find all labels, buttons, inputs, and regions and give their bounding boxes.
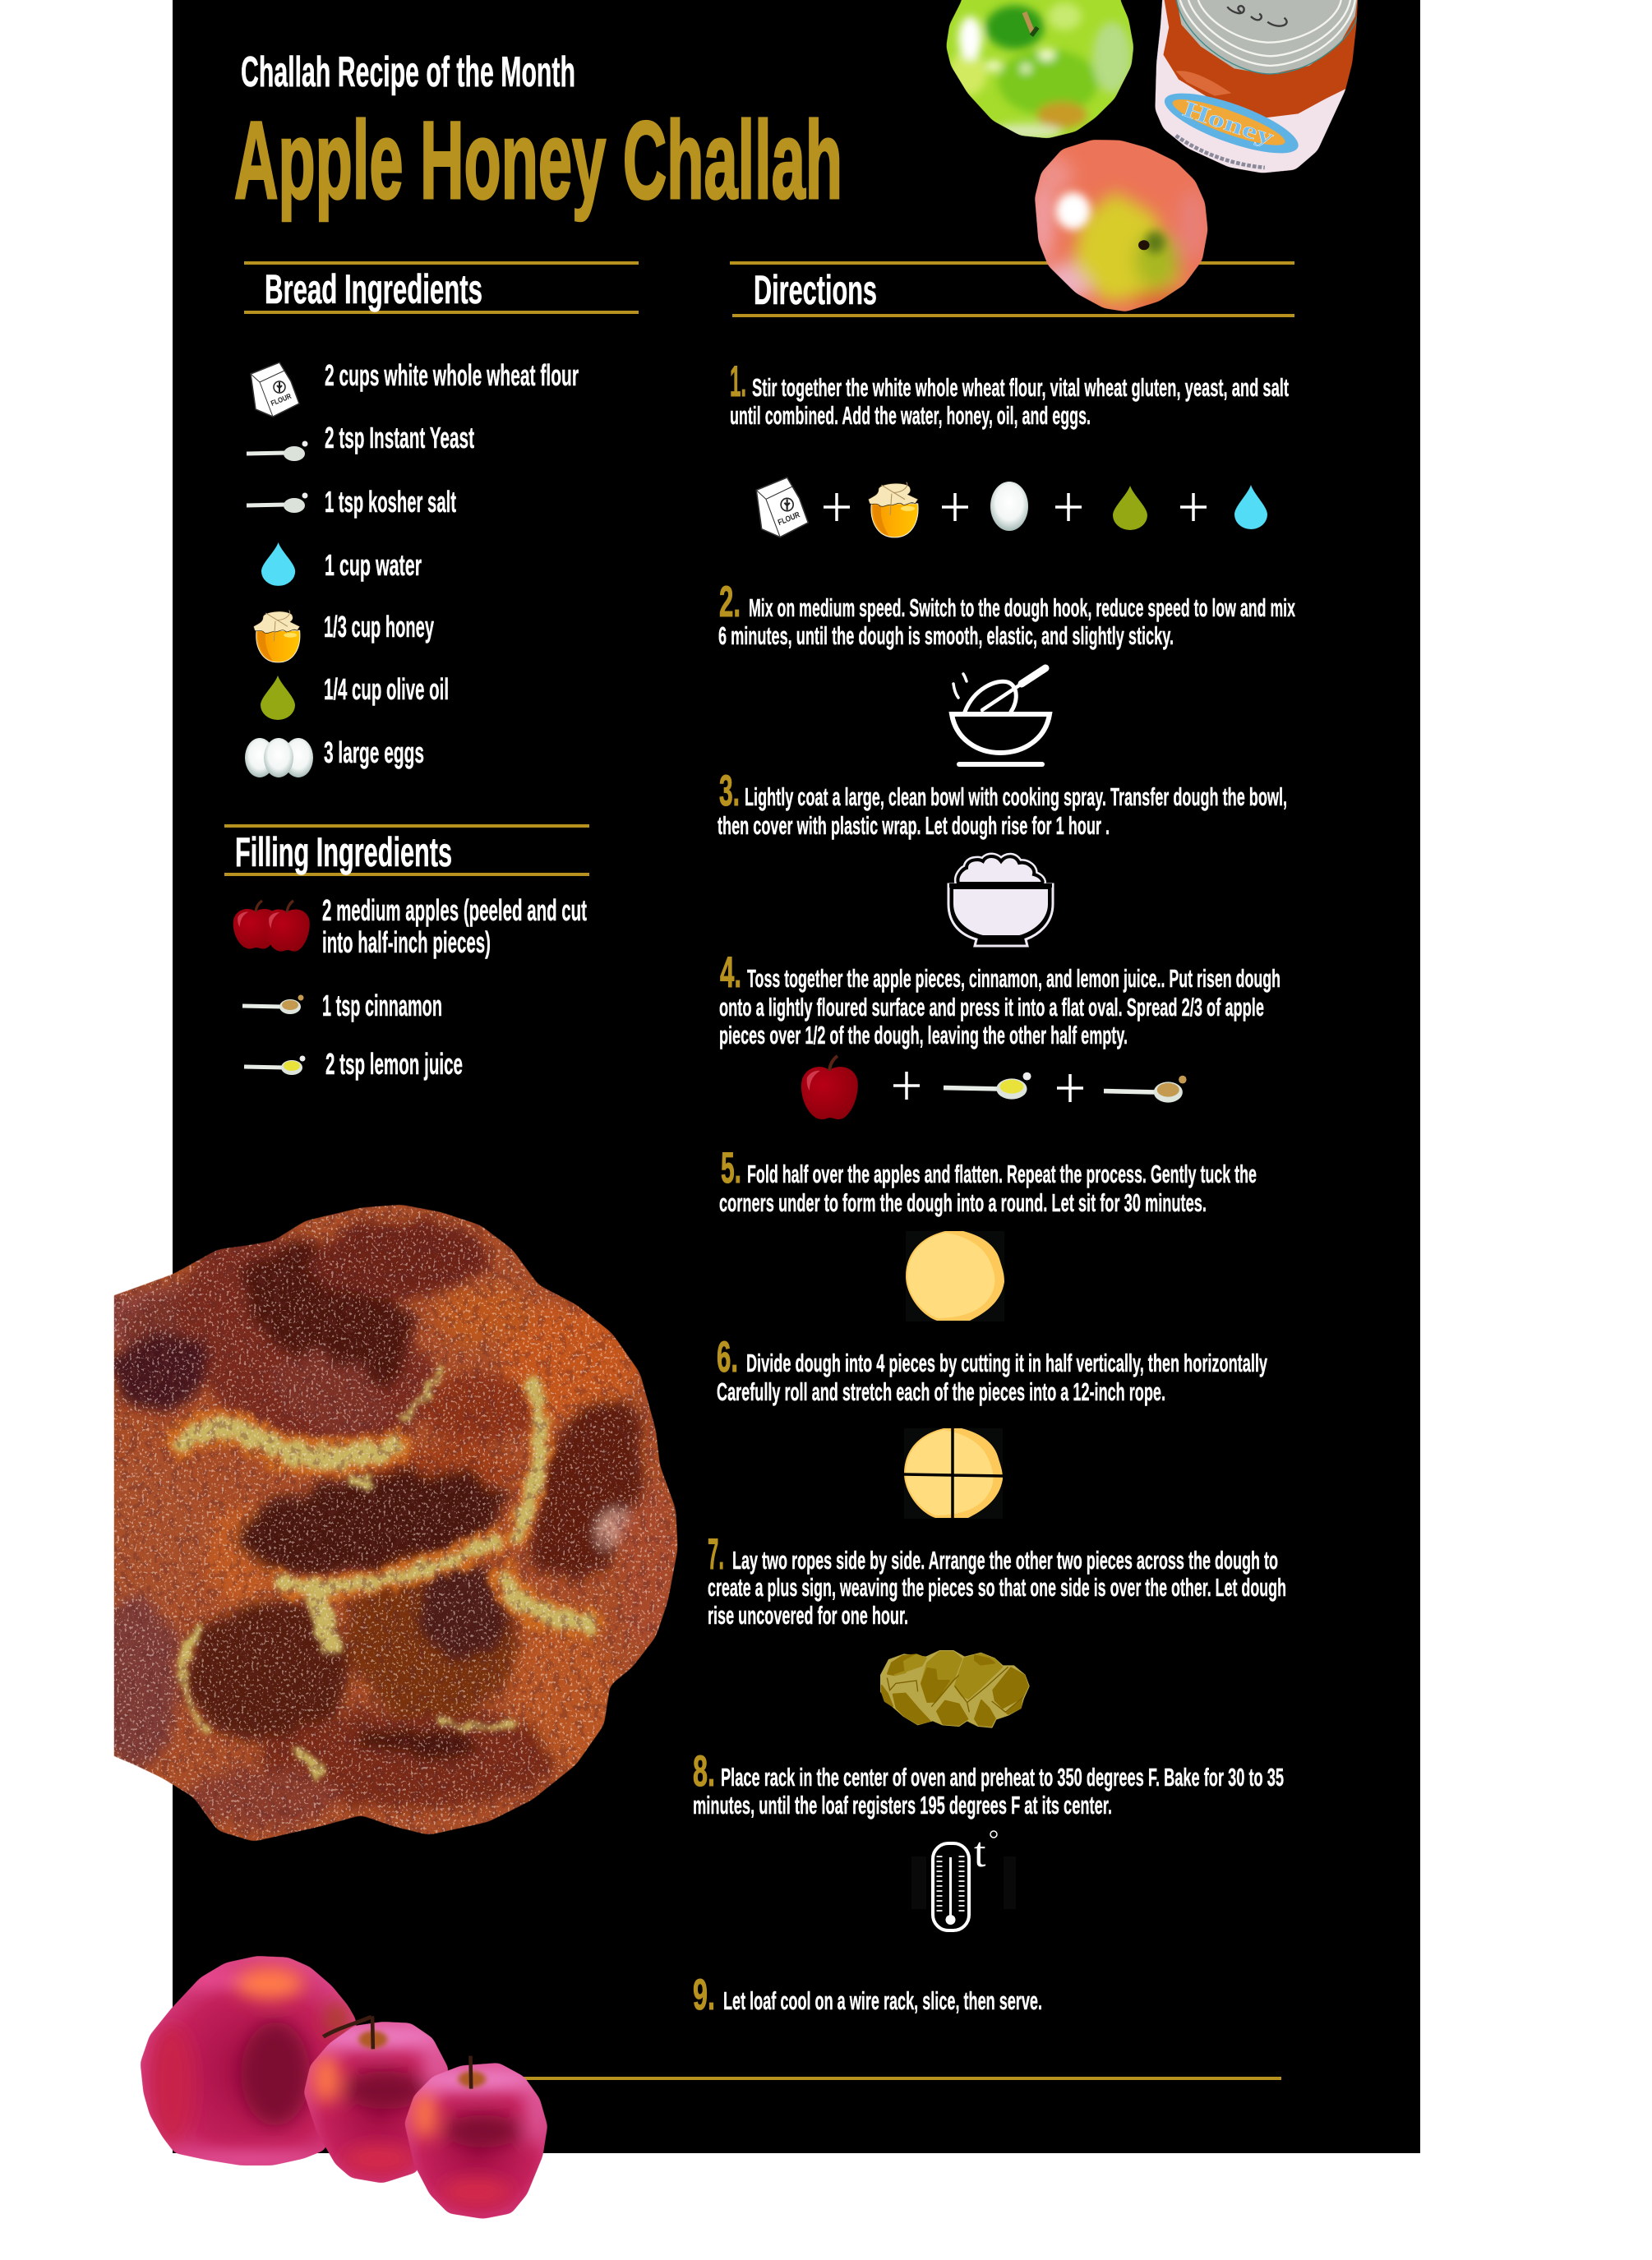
icon: spoon of cinnamon — [242, 994, 304, 1014]
black poster panel — [173, 0, 1420, 2153]
ingredient: salt: 1 tsp kosher salt — [325, 485, 456, 519]
step 5 text: Fold half over the apples and flatten. Repeat the process. Gently tuck the — [747, 1160, 1257, 1188]
icon row: step 1 ingredients — [756, 477, 1267, 537]
icon: spoon of lemon juice — [244, 1055, 306, 1075]
bottom rule — [493, 2077, 1281, 2080]
step 8 — [693, 1747, 1284, 1820]
photo: braided challah loaf — [113, 1205, 678, 1841]
icon: flour bag — [251, 362, 299, 417]
step 7 text: rise uncovered for one hour. — [708, 1601, 908, 1630]
step 4 — [719, 948, 1281, 1049]
step 6 — [717, 1333, 1267, 1406]
step number 9: 9. — [693, 1971, 715, 2019]
icon: oven thermometer — [911, 1829, 1016, 1930]
photo: green apple — [947, 0, 1134, 138]
heading: directions: Directions — [754, 267, 877, 313]
ingredient: olive oil: 1/4 cup olive oil — [324, 672, 449, 706]
jar lid — [1176, 0, 1358, 75]
photo: honey jar — [1155, 0, 1358, 173]
icon: round of dough — [906, 1231, 1004, 1321]
step 9 text: Let loaf cool on a wire rack, slice, then serve. — [723, 1986, 1042, 2015]
icon: spoon of cinnamon — [1104, 1076, 1187, 1103]
honey label — [1164, 94, 1299, 153]
icon: whisk in bowl — [952, 668, 1050, 764]
step 6 text: Divide dough into 4 pieces by cutting it in half vertically, then horizontally — [746, 1349, 1267, 1377]
icon: red apple — [801, 1056, 858, 1119]
plus sign — [942, 493, 968, 521]
panel: bread ingredients — [244, 261, 639, 777]
step 8 text — [693, 1763, 1284, 1820]
icon: water drop — [261, 542, 295, 586]
ingredient: cinnamon: 1 tsp cinnamon — [322, 989, 442, 1022]
icon: spoon of lemon juice — [944, 1072, 1031, 1100]
step number 2: 2. — [719, 578, 741, 626]
step 4 text: onto a lightly floured surface and press it into a flat oval. Spread 2/3 of apple — [719, 993, 1264, 1022]
ingredient: yeast: 2 tsp Instant Yeast — [325, 421, 474, 454]
large apple — [140, 1956, 357, 2166]
step number 6: 6. — [717, 1333, 738, 1381]
ingredient: apples — [322, 893, 587, 959]
plus sign — [893, 1072, 920, 1100]
step 3 text: Lightly coat a large, clean bowl with cooking spray. Transfer dough the bowl, — [745, 782, 1287, 811]
icon: dough cut into four — [904, 1428, 1003, 1519]
icon: flour bag: FLOUR — [777, 510, 801, 528]
step 6 text: Carefully roll and stretch each of the pieces into a 12-inch rope. — [717, 1377, 1165, 1406]
step number 8: 8. — [693, 1747, 715, 1796]
step 1 text: Stir together the white whole wheat flour, vital wheat gluten, yeast, and salt — [752, 373, 1289, 402]
heading: directions — [730, 261, 1294, 317]
heading: filling ingredients: Filling Ingredients — [235, 829, 452, 875]
icon: egg — [990, 482, 1028, 531]
step 2 text: 6 minutes, until the dough is smooth, elastic, and slightly sticky. — [718, 621, 1174, 650]
step 4 text: Toss together the apple pieces, cinnamon, and lemon juice.. Put risen dough — [747, 964, 1281, 993]
photo: red and yellow apple — [1035, 140, 1208, 311]
ingredient: flour: 2 cups white whole wheat flour — [325, 358, 579, 392]
step 1: 1. — [730, 357, 746, 406]
step 7 text: Lay two ropes side by side. Arrange the other two pieces across the dough to — [732, 1546, 1278, 1575]
icon: two red apples — [233, 901, 310, 952]
title: Apple Honey Challah — [234, 99, 842, 222]
step 6 text — [717, 1349, 1267, 1406]
step 5 text — [719, 1160, 1257, 1217]
step 8 text: minutes, until the loaf registers 195 degrees F at its center. — [693, 1791, 1112, 1820]
step 2 text — [718, 593, 1295, 650]
step 3 — [718, 767, 1287, 840]
ingredient: apples: into half-inch pieces) — [322, 925, 491, 959]
icon row: step 4 ingredients — [801, 1056, 1187, 1119]
icon: water drop — [1234, 485, 1267, 529]
icon: oven thermometer: t — [974, 1829, 986, 1876]
step 1 — [730, 357, 1289, 430]
plus sign — [1057, 1074, 1083, 1102]
icon: three eggs — [245, 738, 313, 777]
icon: honey jar — [253, 611, 300, 662]
step 3 text: then cover with plastic wrap. Let dough rise for 1 hour . — [718, 811, 1110, 840]
panel: filling ingredients — [224, 824, 589, 1081]
icon: covered bowl of dough — [948, 856, 1053, 946]
step 1 text: until combined. Add the water, honey, oil, and eggs. — [730, 401, 1091, 430]
icon: spoon of yeast — [247, 440, 307, 461]
step number 4: 4. — [720, 948, 741, 997]
plus sign — [824, 493, 850, 521]
icon: flour bag — [756, 477, 808, 537]
panel: directions — [693, 261, 1295, 2019]
ingredient: water: 1 cup water — [325, 548, 422, 582]
icon: olive oil drop — [261, 676, 295, 720]
photo: three pink apples — [134, 1950, 552, 2221]
icon: flour bag: FLOUR — [270, 392, 293, 408]
ingredient: apples: 2 medium apples (peeled and cut — [322, 893, 587, 927]
honey in jar — [1163, 0, 1359, 118]
heading: bread ingredients: Bread Ingredients — [265, 266, 482, 312]
ingredient: eggs: 3 large eggs — [324, 736, 424, 769]
step number 3: 3. — [719, 767, 740, 815]
plus sign — [1055, 493, 1082, 521]
icon: spoon of salt — [247, 493, 307, 513]
step 8 text: Place rack in the center of oven and preheat to 350 degrees F. Bake for 30 to 35 — [721, 1763, 1284, 1792]
step number 5: 5. — [721, 1144, 741, 1192]
subtitle: Challah Recipe of the Month — [241, 48, 575, 96]
step 1 text — [730, 373, 1289, 430]
small apple — [398, 2056, 552, 2221]
photo: honey jar: Honey — [1179, 96, 1277, 150]
icon: honey jar — [868, 482, 918, 537]
seams of pale crumb — [182, 1368, 588, 1769]
step 7: 7. — [708, 1530, 724, 1579]
icon: olive oil drop — [1113, 486, 1147, 530]
plus sign — [1180, 493, 1207, 521]
step 5 text: corners under to form the dough into a round. Let sit for 30 minutes. — [719, 1188, 1207, 1217]
step 4 text: pieces over 1/2 of the dough, leaving the other half empty. — [719, 1021, 1128, 1049]
step 5 — [719, 1144, 1257, 1217]
loaf colour masses — [113, 1210, 651, 1834]
ingredient: honey: 1/3 cup honey — [324, 610, 434, 643]
middle apple — [301, 2016, 451, 2186]
step 4 text — [719, 964, 1281, 1049]
step 7 text — [708, 1546, 1286, 1630]
ingredient: lemon juice: 2 tsp lemon juice — [325, 1047, 463, 1081]
step 2 — [718, 578, 1295, 650]
step 7 — [708, 1530, 1286, 1630]
icon: braided dough — [881, 1651, 1029, 1727]
step 9 — [693, 1971, 1042, 2019]
step 3 text — [718, 782, 1287, 840]
